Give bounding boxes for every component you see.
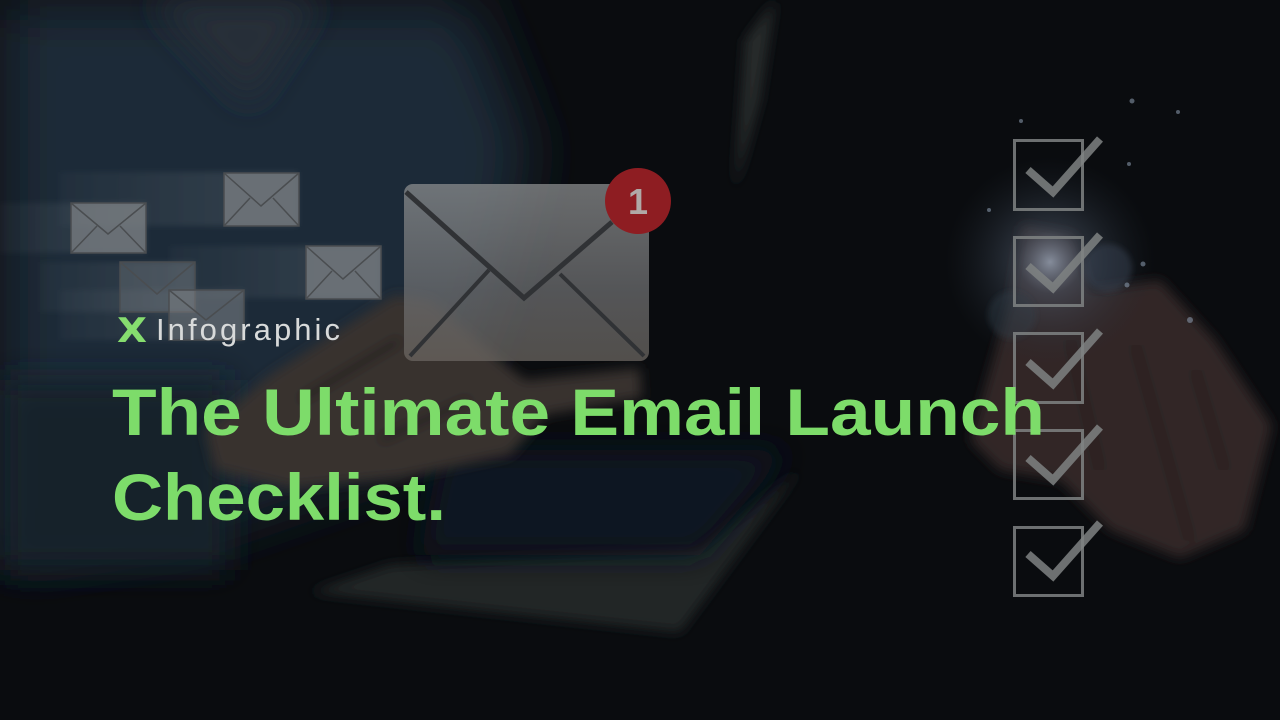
envelope 5 bbox=[169, 290, 244, 340]
checkbox 2 bbox=[1014, 235, 1100, 306]
notification badge bbox=[605, 168, 671, 234]
title: The Ultimate Email Launch bbox=[112, 375, 1045, 449]
checkbox 3 bbox=[1014, 331, 1100, 402]
checkbox 1 bbox=[1014, 139, 1100, 210]
large envelope with notification badge bbox=[404, 168, 671, 361]
small envelopes bbox=[71, 173, 381, 340]
title: Checklist. bbox=[112, 460, 446, 534]
laptop bbox=[310, 470, 800, 632]
notification badge: 1 bbox=[628, 181, 648, 222]
label: Infographic: Infographic bbox=[156, 312, 340, 347]
right hand bbox=[970, 225, 1272, 558]
title bbox=[112, 375, 1045, 534]
motion streaks behind small envelopes bbox=[0, 172, 380, 340]
envelope 2 bbox=[224, 173, 299, 226]
envelope 3 bbox=[120, 262, 195, 312]
checklist icons bbox=[1014, 139, 1100, 596]
sparkle dots bbox=[987, 98, 1193, 323]
checkbox 4 bbox=[1014, 427, 1100, 498]
person shirt bbox=[0, 0, 530, 560]
suit highlight bbox=[735, 0, 775, 190]
envelope 4 bbox=[306, 246, 381, 299]
brand mark: X: X bbox=[117, 311, 147, 351]
glow bbox=[945, 157, 1155, 367]
left hand bbox=[205, 295, 642, 488]
checkbox 5 bbox=[1014, 523, 1100, 596]
envelope 1 bbox=[71, 203, 146, 253]
